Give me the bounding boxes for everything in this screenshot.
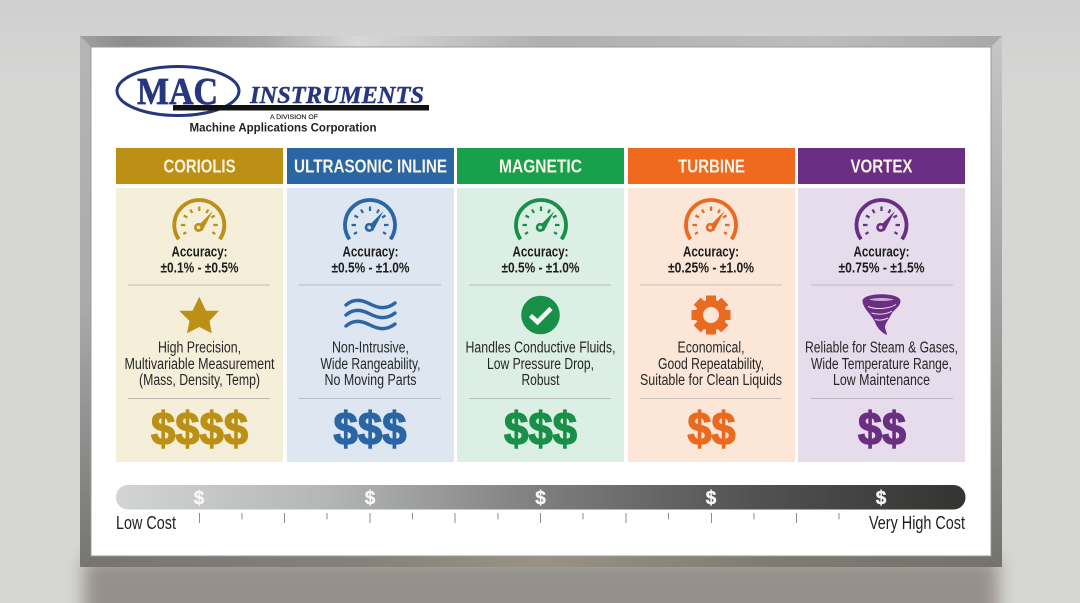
- cost rating: four dollars: $$$$: [151, 402, 248, 454]
- icon: gauge: [516, 200, 566, 239]
- accuracy text: [160, 244, 239, 276]
- logo MAC: MAC: [137, 71, 218, 113]
- panel: Coriolis: [116, 148, 283, 462]
- metal frame: [80, 36, 1002, 567]
- bar dollar markers: $: [194, 488, 205, 509]
- bar dollar markers: $: [706, 488, 717, 509]
- cost rating: two dollars: $$: [688, 402, 736, 454]
- icon: gauge: [856, 200, 906, 239]
- feature text: Robust: [522, 372, 560, 389]
- accuracy text: [502, 244, 580, 276]
- panel: Vortex: [798, 148, 965, 462]
- logo company name: Machine Applications Corporation: [190, 122, 376, 134]
- icon: star: [179, 297, 219, 333]
- cost scale: [116, 485, 966, 533]
- accuracy text: Accuracy:: [512, 244, 568, 260]
- accuracy text: Accuracy:: [854, 244, 910, 260]
- feature text: [805, 340, 958, 389]
- accuracy text: ±0.25% - ±1.0%: [668, 260, 754, 276]
- cost rating: two dollars: $$: [858, 402, 906, 454]
- header: Magnetic: [457, 148, 624, 184]
- tick marks: [200, 513, 839, 523]
- feature text: Economical,: [678, 340, 744, 356]
- feature text: Wide Temperature Range,: [811, 356, 952, 373]
- logo division line: A DIVISION OF: [270, 114, 318, 121]
- header: Ultrasonic Inline: [287, 148, 454, 184]
- icon: tornado: [862, 294, 900, 335]
- label: very high cost: Very High Cost: [869, 513, 965, 533]
- feature text: Handles Conductive Fluids,: [466, 340, 616, 356]
- feature text: [640, 340, 782, 389]
- feature text: (Mass, Density, Temp): [139, 372, 260, 389]
- header: Ultrasonic Inline: ULTRASONIC INLINE: [294, 156, 447, 176]
- bar dollar markers: $: [365, 488, 376, 509]
- cost rating: three dollars: $$$: [504, 402, 577, 454]
- header: Turbine: TURBINE: [678, 156, 745, 176]
- logo INSTRUMENTS: INSTRUMENTS: [249, 83, 424, 109]
- feature text: [320, 340, 420, 389]
- accuracy text: Accuracy:: [172, 244, 228, 260]
- feature text: [124, 340, 275, 389]
- feature text: Low Pressure Drop,: [487, 356, 594, 373]
- feature text: Suitable for Clean Liquids: [640, 372, 782, 389]
- accuracy text: Accuracy:: [683, 244, 739, 260]
- header: Coriolis: [116, 148, 283, 184]
- accuracy text: ±0.5% - ±1.0%: [502, 260, 580, 276]
- panel: Turbine: [628, 148, 795, 462]
- feature text: [466, 340, 616, 389]
- icon: gauge: [686, 200, 736, 239]
- feature text: Good Repeatability,: [658, 356, 764, 373]
- card body: Ultrasonic Inline: [287, 188, 454, 462]
- logo: MAC Instruments: [117, 66, 429, 134]
- accuracy text: [332, 244, 410, 276]
- accuracy text: ±0.75% - ±1.5%: [838, 260, 925, 276]
- header: Turbine: [628, 148, 795, 184]
- icon: waves: [346, 300, 395, 329]
- header: Vortex: [798, 148, 965, 184]
- bar dollar markers: [194, 488, 887, 509]
- feature text: Reliable for Steam & Gases,: [805, 340, 958, 356]
- logo ellipse: [117, 66, 239, 116]
- feature text: High Precision,: [158, 340, 241, 356]
- header: Coriolis: CORIOLIS: [164, 156, 236, 176]
- gradient bar: [116, 485, 966, 510]
- feature text: Wide Rangeability,: [320, 356, 420, 373]
- accuracy text: ±0.1% - ±0.5%: [160, 260, 239, 276]
- label: low cost: Low Cost: [116, 513, 176, 533]
- accuracy text: [838, 244, 925, 276]
- icon: gauge: [345, 200, 395, 239]
- feature text: Non-Intrusive,: [332, 340, 409, 356]
- feature text: Low Maintenance: [833, 372, 930, 389]
- logo underline: [173, 105, 429, 110]
- accuracy text: ±0.5% - ±1.0%: [332, 260, 410, 276]
- card body: Vortex: [798, 188, 965, 462]
- header: Magnetic: MAGNETIC: [499, 156, 582, 176]
- card body: Magnetic: [457, 188, 624, 462]
- icon: check circle: [521, 296, 560, 334]
- feature text: No Moving Parts: [324, 372, 417, 389]
- card body: Turbine: [628, 188, 795, 462]
- feature text: Multivariable Measurement: [124, 356, 275, 373]
- cost rating: three dollars: $$$: [334, 402, 406, 454]
- accuracy text: Accuracy:: [342, 244, 398, 260]
- panel: Ultrasonic Inline: [287, 148, 454, 462]
- card body: Coriolis: [116, 188, 283, 462]
- bar dollar markers: $: [876, 488, 887, 509]
- bar dollar markers: $: [535, 488, 546, 509]
- header: Vortex: VORTEX: [850, 156, 913, 176]
- icon: gauge: [174, 200, 224, 239]
- panel: Magnetic: [457, 148, 624, 462]
- icon: gear: [692, 296, 730, 334]
- accuracy text: [668, 244, 754, 276]
